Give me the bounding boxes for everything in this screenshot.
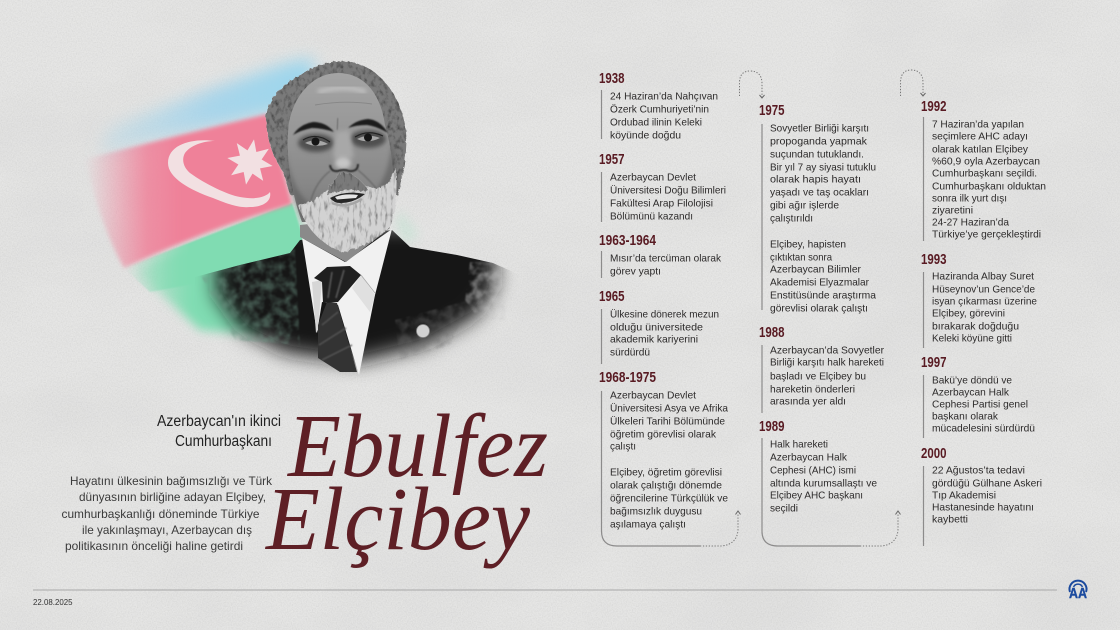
entry 1963-1964: Mısır’da tercüman olarak — [610, 254, 722, 264]
entry 1975: Akademisi Elyazmalar — [770, 278, 870, 288]
entry 1968-1975: öğrencilerine Türkçülük ve — [610, 494, 728, 504]
entry 1968-1975: olarak çalıştığı dönemde — [610, 480, 722, 492]
portrait — [198, 61, 505, 375]
entry 1993: Keleki köyüne gitti — [932, 334, 1012, 344]
timeline column 1 — [599, 71, 728, 546]
entry 1975: 1975 — [759, 103, 784, 119]
description paragraph: cumhurbaşkanlığı döneminde Türkiye — [62, 507, 260, 521]
entry 1993: Haziranda Albay Suret — [932, 272, 1034, 282]
entry 1992: sonra ilk yurt dışı — [932, 194, 1007, 204]
entry 1988: Azerbaycan’da Sovyetler — [770, 346, 885, 356]
portrait: eyebrows — [293, 119, 388, 135]
entry 1992: seçimlere AHC adayı — [932, 132, 1028, 142]
entry 1989: altında kurumsallaştı ve — [770, 478, 877, 490]
entry 1997: Bakü’ye döndü ve — [932, 376, 1012, 386]
arrow: column 2 bottom connector — [860, 511, 900, 546]
description paragraph: ile yakınlaşmayı, Azerbaycan dış — [82, 523, 252, 537]
entry 1975: olarak hapis hayatı — [770, 174, 861, 186]
portrait: face — [286, 73, 395, 222]
entry 1992: 24-27 Haziran’da — [932, 218, 1009, 228]
entry 1992: Cumhurbaşkanı seçildi. — [932, 168, 1037, 180]
entry 1975: suçundan tutuklandı. — [770, 150, 864, 160]
entry 1965: 1965 — [599, 289, 624, 305]
description paragraph: politikasının önceliği haline getirdi — [65, 539, 243, 553]
subtitle — [157, 413, 281, 450]
entry 1997 — [921, 355, 1035, 438]
flag: crescent — [168, 140, 270, 207]
entry 1957 — [599, 152, 726, 222]
entry 1997: mücadelesini sürdürdü — [932, 424, 1035, 434]
entry 1992: Türkiye’ye gerçekleştirdi — [932, 230, 1041, 240]
portrait: shirt — [302, 229, 392, 375]
entry 1968-1975 — [599, 370, 728, 546]
entry 1938: 1938 — [599, 71, 624, 87]
entry 1993: Elçibey, görevini — [932, 308, 1005, 320]
entry 1989: Elçibey AHC başkanı — [770, 490, 863, 502]
entry 1965 — [599, 289, 719, 364]
entry 1993 — [921, 252, 1037, 348]
arrow: column 2 to column 3 — [900, 70, 926, 96]
flag: red band — [85, 114, 292, 268]
entry 1975: yaşadı ve taş ocakları — [770, 188, 869, 198]
portrait: mouth — [330, 193, 365, 205]
entry 1938: Özerk Cumhuriyeti’nin — [610, 104, 709, 116]
entry 2000: Tıp Akademisi — [932, 490, 996, 502]
entry 1938 — [599, 71, 718, 142]
entry 1963-1964: 1963-1964 — [599, 233, 656, 249]
entry 1957: 1957 — [599, 152, 624, 168]
portrait: suit — [198, 225, 505, 362]
portrait: tie — [314, 266, 361, 372]
portrait: nose — [330, 130, 358, 171]
entry 1988 — [759, 325, 885, 413]
entry 1957: Fakültesi Arap Filolojisi — [610, 198, 713, 210]
entry 1938: köyünde doğdu — [610, 130, 681, 142]
entry 1968-1975: Üniversitesi Asya ve Afrika — [610, 402, 728, 414]
entry 1992: Cumhurbaşkanı olduktan — [932, 182, 1046, 192]
entry 1968-1975: Elçibey, öğretim görevlisi — [610, 468, 722, 478]
entry 1997: başkanı olarak — [932, 412, 999, 422]
entry 1997: Cephesi Partisi genel — [932, 400, 1028, 410]
portrait: eyes — [303, 133, 383, 146]
entry 1992: %60,9 oyla Azerbaycan — [932, 156, 1040, 168]
entry 1957: Bölümünü kazandı — [610, 212, 693, 222]
entry 1938: 24 Haziran’da Nahçıvan — [610, 92, 718, 102]
entry 1988: hareketin önderleri — [770, 384, 855, 396]
description paragraph — [62, 474, 273, 553]
entry 1975: gibi ağır işlerde — [770, 200, 839, 212]
portrait: beard — [298, 168, 397, 252]
entry 1968-1975: bağımsızlık duygusu — [610, 506, 702, 518]
entry 1968-1975: öğretim görevlisi olarak — [610, 430, 717, 440]
entry 2000: 2000 — [921, 446, 946, 462]
entry 1957: Azerbaycan Devlet — [610, 172, 696, 184]
entry 1988: 1988 — [759, 325, 784, 341]
portrait: neck — [300, 215, 390, 262]
icon: AA agency logo — [1069, 581, 1087, 602]
entry 1992 — [921, 99, 1046, 241]
entry 1975: Azerbaycan Bilimler — [770, 264, 862, 276]
entry 1965: olduğu üniversitede — [610, 322, 703, 334]
entry 1989: Azerbaycan Halk — [770, 452, 848, 464]
flag: star — [223, 135, 277, 189]
entry 2000: 22 Ağustos’ta tedavi — [932, 466, 1025, 476]
entry 1989: seçildi — [770, 504, 798, 514]
entry 1992: olarak katılan Elçibey — [932, 144, 1029, 156]
entry 1968-1975: aşılamaya çalıştı — [610, 520, 686, 530]
entry 1975: Enstitüsünde araştırma — [770, 290, 876, 302]
entry 1993: 1993 — [921, 252, 946, 268]
entry 1975: propoganda yapmak — [770, 136, 868, 148]
entry 1963-1964: görev yaptı — [610, 266, 661, 278]
entry 1989: Halk hareketi — [770, 440, 828, 450]
entry 2000 — [921, 446, 1042, 546]
portrait: hair — [266, 61, 407, 195]
entry 1975: çıktıktan sonra — [770, 252, 832, 264]
subtitle: Cumhurbaşkanı — [175, 433, 272, 450]
entry 1968-1975: çalıştı — [610, 442, 636, 452]
entry 1957: Üniversitesi Doğu Bilimleri — [610, 184, 726, 196]
entry 1968-1975: 1968-1975 — [599, 370, 656, 386]
timeline column 2 — [759, 103, 885, 546]
entry 1965: Ülkesine dönerek mezun — [610, 308, 719, 320]
name title: Ebulfez — [286, 397, 548, 496]
entry 2000: Hastanesinde hayatını — [932, 502, 1034, 514]
entry 1992: ziyaretini — [932, 206, 973, 216]
entry 1975: Bir yıl 7 ay siyasi tutuklu — [770, 162, 876, 174]
portrait: eye sockets — [298, 134, 334, 152]
entry 1989: Cephesi (AHC) ismi — [770, 466, 856, 476]
description paragraph: dünyasının birliğine adayan Elçibey, — [79, 490, 266, 504]
entry 1975: çalıştırıldı — [770, 214, 813, 224]
entry 1992: 1992 — [921, 99, 946, 115]
name title: Elçibey — [264, 470, 530, 569]
timeline column 3 — [921, 99, 1046, 546]
arrow: column 1 bottom connector — [700, 511, 740, 546]
entry 1989 — [759, 419, 877, 546]
portrait: moustache — [326, 173, 369, 196]
entry 1989: 1989 — [759, 419, 784, 435]
flag: blue band — [98, 58, 314, 155]
entry 1968-1975: Azerbaycan Devlet — [610, 390, 696, 402]
entry 1975: Sovyetler Birliği karşıtı — [770, 124, 869, 134]
entry 1993: isyan çıkarması üzerine — [932, 296, 1037, 308]
entry 2000: kaybetti — [932, 514, 968, 526]
entry 1993: bırakarak doğduğu — [932, 322, 1019, 332]
entry 1965: sürdürdü — [610, 348, 650, 358]
name title — [264, 397, 548, 569]
entry 1997: Azerbaycan Halk — [932, 388, 1010, 398]
portrait: cheek folds — [311, 170, 379, 200]
entry 1992: 7 Haziran’da yapılan — [932, 120, 1024, 130]
portrait: lapel pin — [416, 324, 430, 338]
subtitle: Azerbaycan'ın ikinci — [157, 413, 281, 430]
entry 1968-1975: Ülkeleri Tarihi Bölümünde — [610, 416, 725, 428]
entry 1975 — [759, 103, 876, 314]
description paragraph: Hayatını ülkesinin bağımsızlığı ve Türk — [70, 474, 273, 488]
entry 1988: Birliği karşıtı halk hareketi — [770, 358, 884, 368]
entry 1963-1964 — [599, 233, 722, 278]
flag: green band — [124, 203, 420, 335]
entry 1975: Elçibey, hapisten — [770, 240, 846, 250]
entry 1938: Ordubad ilinin Keleki — [610, 118, 702, 128]
entry 1988: arasında yer aldı — [770, 396, 846, 408]
entry 2000: gördüğü Gülhane Askeri — [932, 478, 1042, 490]
entry 1965: akademik kariyerini — [610, 334, 698, 346]
entry 1993: Hüseynov’un Gence’de — [932, 284, 1035, 296]
icon: AA agency logo: AA — [1069, 585, 1087, 602]
entry 1975: görevlisi olarak çalıştı — [770, 304, 868, 314]
entry 1988: başladı ve Elçibey bu — [770, 372, 866, 382]
date: 22.08.2025 — [33, 597, 73, 607]
footer rule — [33, 590, 1057, 591]
arrow: column 1 to column 2 — [740, 71, 764, 98]
entry 1997: 1997 — [921, 355, 946, 371]
flag of Azerbaijan — [85, 58, 420, 335]
